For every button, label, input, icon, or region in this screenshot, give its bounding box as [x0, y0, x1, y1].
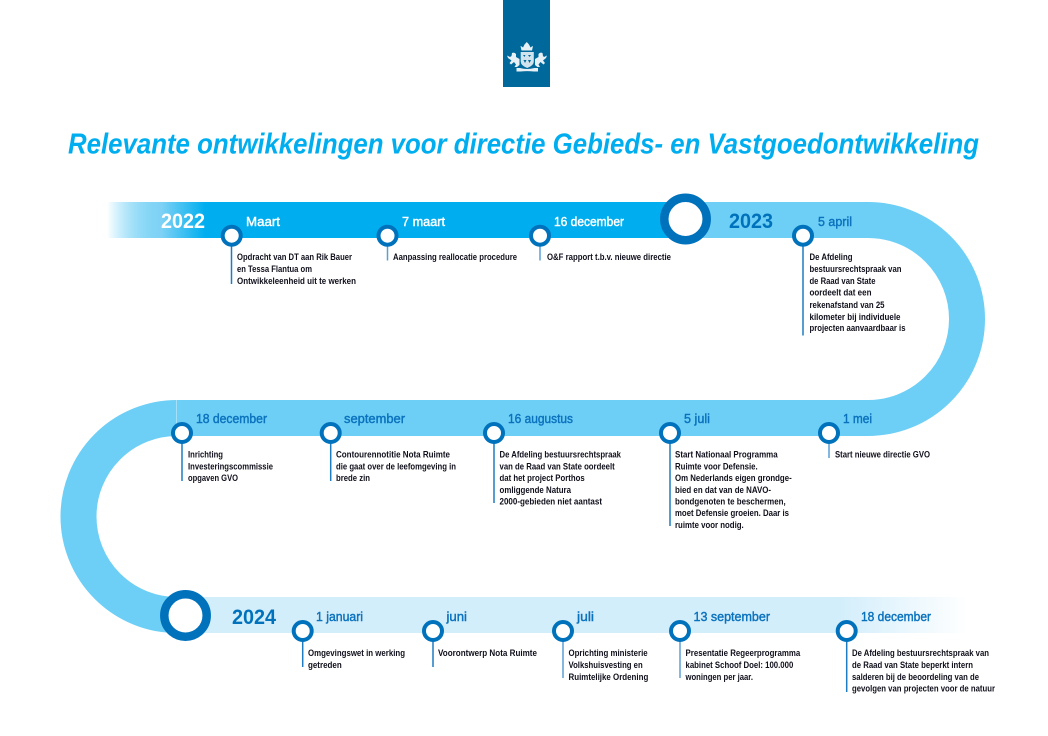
event: 5 juli 2023: 5 juli: [684, 411, 710, 426]
event: 18 december 2023: Inrichting: [188, 450, 223, 460]
event: 18 december 2024: De Afdeling bestuursrechtspraak van: [852, 648, 989, 658]
event: juli 2024: Volkshuisvesting en: [568, 660, 643, 670]
event: 1 mei 2023: Start nieuwe directie GVO: [835, 450, 930, 460]
event: 13 september 2024: [671, 609, 801, 682]
event: 5 april 2023: oordeelt dat een: [810, 288, 872, 298]
event: 13 september 2024: 13 september: [694, 609, 771, 624]
event: 18 december 2023: opgaven GVO: [188, 473, 238, 483]
event: 5 april 2023: rekenafstand van 25: [810, 300, 884, 310]
event: Maart 2022: Maart: [246, 214, 280, 229]
event: juni 2024: Voorontwerp Nota Ruimte: [438, 648, 537, 658]
icon: shield: [521, 52, 534, 68]
band 2024: [186, 597, 840, 633]
event: september 2023: die gaat over de leefomgeving in: [336, 462, 456, 472]
event: 5 april 2023: 5 april: [818, 214, 852, 229]
event: 5 juli 2023: Start Nationaal Programma: [675, 450, 778, 460]
year 2023: 2023: [729, 210, 773, 233]
icon: left lion: [507, 53, 520, 67]
event: 1 januari 2024: 1 januari: [316, 609, 363, 624]
event: 1 mei 2023: [820, 411, 930, 460]
event: september 2023: september: [344, 411, 406, 426]
event: Maart 2022: Ontwikkeleenheid uit te werken: [237, 276, 356, 286]
event: 16 augustus 2023: 2000-gebieden niet aantast: [500, 496, 602, 506]
event: 16 augustus 2023: van de Raad van State oordeelt: [500, 462, 615, 472]
event: 16 augustus 2023: dat het project Porthos: [500, 473, 585, 483]
event: 5 april 2023: [794, 214, 906, 336]
year ring 2023: [664, 198, 707, 240]
event: 7 maart 2022: Aanpassing reallocatie procedure: [393, 252, 517, 262]
event: 5 april 2023: de Raad van State: [810, 276, 876, 286]
event: 7 maart 2022: 7 maart: [402, 214, 445, 229]
event: 16 december 2022: [531, 214, 671, 262]
event: juli 2024: juli: [576, 609, 594, 624]
event: juli 2024: Oprichting ministerie: [568, 648, 648, 658]
event: 5 april 2023: projecten aanvaardbaar is: [810, 323, 906, 333]
event: 13 september 2024: woningen per jaar.: [685, 672, 753, 682]
event: 18 december 2023: Investeringscommissie: [188, 462, 273, 472]
icon: crown: [520, 42, 533, 50]
event: juli 2024: [554, 609, 649, 682]
year ring 2024: [164, 594, 207, 637]
event: 1 januari 2024: getreden: [308, 660, 342, 670]
band 2024 fade: [840, 597, 968, 633]
event: Maart 2022: en Tessa Flantua om: [237, 264, 312, 274]
event: 18 december 2024: salderen bij de beoordeling van de: [852, 672, 979, 682]
event: 5 april 2023: bestuursrechtspraak van: [810, 264, 902, 274]
event: 18 december 2023: 18 december: [196, 411, 268, 426]
event: 5 juli 2023: moet Defensie groeien. Daar is: [675, 508, 789, 518]
event: 18 december 2024: gevolgen van projecten voor de natuur: [852, 684, 995, 694]
year 2024: 2024: [232, 606, 276, 629]
event: 5 juli 2023: Ruimte voor Defensie.: [675, 462, 758, 472]
event: juli 2024: Ruimtelijke Ordening: [568, 672, 649, 682]
event: 13 september 2024: kabinet Schoof Doel: 100.000: [686, 660, 793, 670]
event: 18 december 2024: de Raad van State beperkt intern: [852, 660, 973, 670]
event: juni 2024: [424, 609, 537, 667]
event: 18 december 2023: [173, 411, 273, 483]
band 2023 and curves: [78, 220, 967, 615]
event: juni 2024: juni: [445, 609, 467, 624]
event: 16 december 2022: O&F rapport t.b.v. nieuwe directie: [547, 252, 671, 262]
event: 16 augustus 2023: [485, 411, 622, 506]
event: 5 juli 2023: ruimte voor nodig.: [675, 520, 744, 530]
event: 5 april 2023: De Afdeling: [810, 252, 853, 262]
event: 7 maart 2022: [378, 214, 517, 262]
icon: right lion: [535, 53, 547, 67]
band 2022: [107, 202, 205, 238]
event: 5 juli 2023: bondgenoten te beschermen,: [675, 496, 786, 506]
event: september 2023: brede zin: [336, 473, 370, 483]
event: Maart 2022: [223, 214, 356, 286]
event: september 2023: Contourennotitie Nota Ruimte: [336, 450, 450, 460]
event: september 2023: [322, 411, 456, 483]
timeline band: [78, 202, 968, 633]
event: 13 september 2024: Presentatie Regeerprogramma: [686, 648, 801, 658]
event: 16 augustus 2023: omliggende Natura: [500, 485, 572, 495]
event: 5 juli 2023: bied en dat van de NAVO-: [675, 485, 771, 495]
year 2022: 2022: [161, 210, 205, 233]
event: 18 december 2024: [838, 609, 995, 694]
event: 5 juli 2023: [661, 411, 792, 530]
event: 16 december 2022: 16 december: [554, 214, 625, 229]
icon: ribbon: [516, 68, 538, 72]
event: 1 januari 2024: [294, 609, 405, 670]
event: 18 december 2024: 18 december: [861, 609, 932, 624]
event: 16 augustus 2023: 16 augustus: [508, 411, 573, 426]
logo: Rijksoverheid crest: [503, 0, 550, 87]
event: 5 juli 2023: Om Nederlands eigen grondge-: [675, 473, 792, 483]
event: 16 augustus 2023: De Afdeling bestuursrechtspraak: [500, 450, 622, 460]
event: 5 april 2023: kilometer bij individuele: [810, 312, 900, 322]
event: Maart 2022: Opdracht van DT aan Rik Bauer: [237, 252, 352, 262]
event: 1 mei 2023: 1 mei: [843, 411, 872, 426]
event: 1 januari 2024: Omgevingswet in werking: [308, 648, 405, 658]
